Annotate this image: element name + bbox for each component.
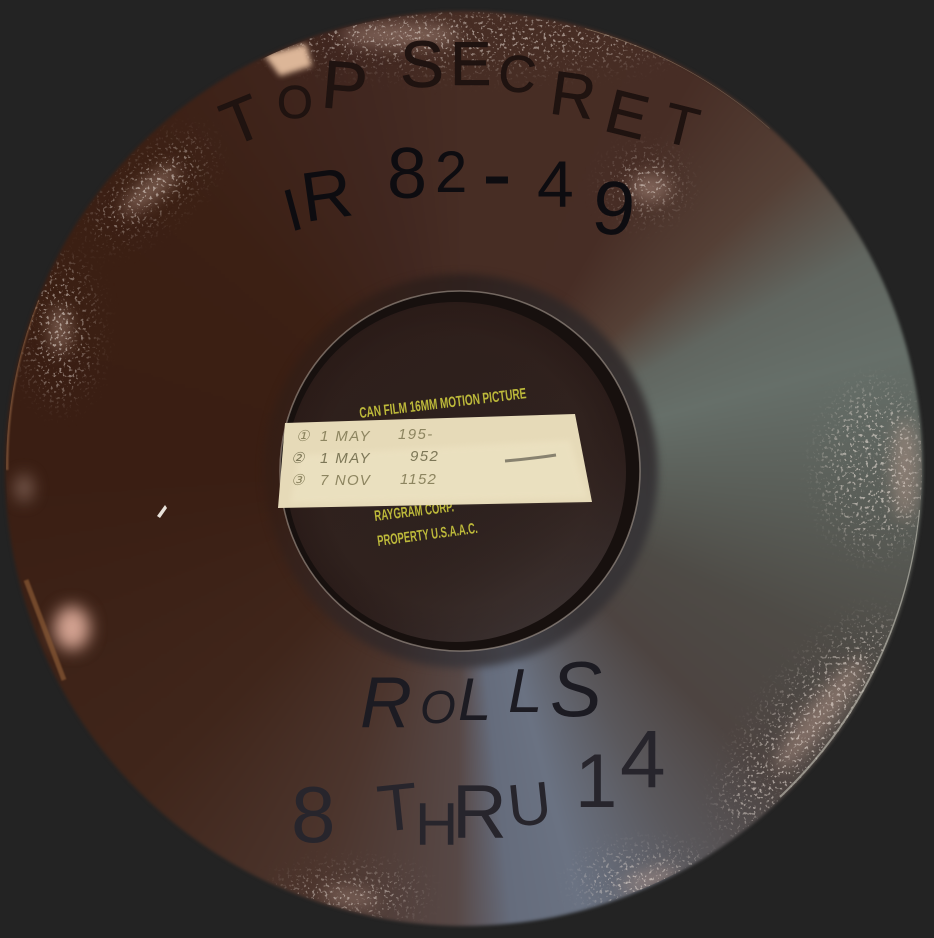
handwriting: 8 thru 14: H — [415, 791, 458, 858]
masking tape label with dates — [278, 414, 592, 508]
handwriting: top secret: E — [450, 30, 491, 99]
handwriting: top secret: R — [546, 59, 600, 133]
tape date: roll one: 1 MAY — [320, 428, 371, 445]
handwriting: 8 thru 14: 1 — [575, 739, 617, 824]
handwriting: IR 82-49: 2 — [435, 140, 467, 205]
handwriting: IR 82-49: 8 — [387, 134, 427, 214]
handwriting: rolls: L — [508, 657, 542, 726]
handwriting: rolls: O — [420, 681, 456, 733]
handwriting: top secret: T — [211, 82, 272, 160]
printed label: can film 16mm motion picture: CAN FILM 16MM MOTION PICTURE — [358, 385, 527, 422]
tape date: roll two: 952 — [410, 448, 439, 465]
printed label: property: PROPERTY U.S.A.A.C. — [376, 520, 479, 550]
handwriting: top secret: P — [319, 46, 371, 126]
tape date: roll one: 195- — [398, 426, 434, 443]
handwriting: rolls: L — [458, 666, 491, 733]
handwriting: IR 82-49: R — [296, 153, 357, 237]
tape date: roll two: 1 MAY — [320, 450, 371, 467]
printed label: company: RAYGRAM CORP. — [373, 498, 455, 525]
handwriting: IR 82-49: - — [482, 124, 512, 224]
handwriting: 8 thru 14: 8 — [291, 770, 336, 859]
handwriting: IR 82-49: 4 — [537, 147, 574, 221]
handwriting: top secret: E — [599, 77, 655, 154]
handwriting: top secret: C — [496, 44, 538, 105]
tape date: roll three: ③ — [291, 472, 306, 489]
bright worn patches — [264, 44, 312, 76]
handwriting: top secret: T — [657, 91, 706, 160]
handwriting: rolls: S — [550, 645, 602, 733]
handwriting: 8 thru 14: T — [374, 768, 422, 846]
tape date: roll three: 7 NOV — [320, 472, 372, 489]
handwriting: top secret: O — [277, 76, 313, 128]
chip mark on left of lid — [157, 505, 167, 518]
handwriting: 8 thru 14: 4 — [620, 714, 666, 805]
handwriting: IR 82-49: 9 — [588, 164, 639, 253]
tape date: roll three: 1152 — [400, 471, 437, 488]
tape date: roll two: ② — [291, 450, 306, 467]
handwriting: 8 thru 14: R — [452, 770, 507, 855]
handwriting: IR 82-49: I — [276, 176, 309, 245]
handwriting: rolls: R — [360, 663, 412, 743]
handwriting: 8 thru 14: U — [504, 769, 554, 840]
recessed hub — [280, 291, 640, 651]
tape date: roll one: ① — [296, 428, 311, 445]
handwriting: top secret: S — [400, 27, 444, 101]
raised lip around hub — [264, 274, 658, 668]
